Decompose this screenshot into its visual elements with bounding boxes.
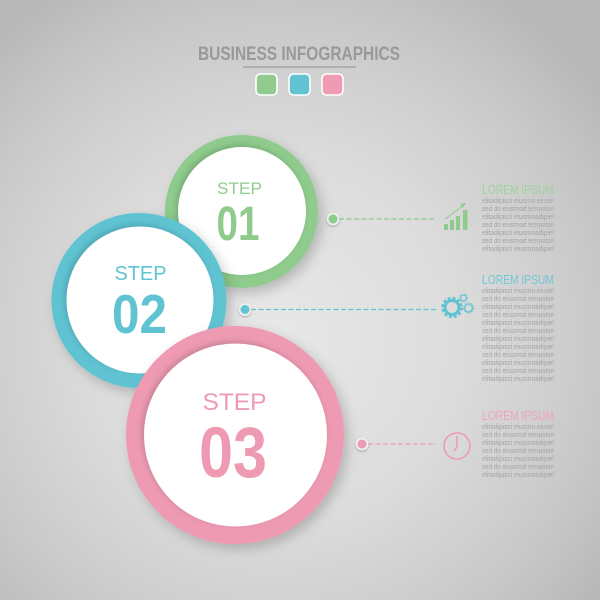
text block 02: sed do eiusmod tempotse [482,366,554,375]
step 03 circle: 03 [199,414,267,493]
text block 03: LOREM IPSUM [482,408,554,423]
connector 01 [328,214,436,224]
step 02 circle: 02 [112,283,167,345]
text block 03: elitadipisci eiusmo eiusel [482,422,554,431]
text block 02: sed do eiusmod tempotse [482,350,554,359]
text block 03: elitadipisci eiusmoadipiel [482,438,554,447]
legend swatches [256,74,343,95]
connector 03 [356,438,436,450]
icon: gears [442,294,474,317]
text block 01: sed do eiusmod tempotse [482,236,554,245]
text block 02: elitadipisci eiusmoadipiel [482,318,554,327]
connector 02 [240,304,436,315]
text block 02: sed do eiusmod tempotse [482,326,554,335]
step 03 circle: STEP [202,389,266,416]
step 02 circle: STEP [114,263,166,285]
text block 02: sed do eiusmod tempotse [482,310,554,319]
text block 02: elitadipisci eiusmoadipiel [482,358,554,367]
text block 01 [482,182,554,253]
step 02 circle [52,213,226,388]
text block 03: sed do eiusmod tempotse [482,462,554,471]
text block 03: elitadipisci eiusmoadipiel [482,470,554,479]
step 03 circle [126,326,344,544]
step 01 circle [165,135,318,288]
text block 02 [482,272,554,383]
text block 02: sed do eiusmod tempotse [482,294,554,303]
text block 01: elitadipisci eiusmoadipiel [482,244,554,253]
text block 01: sed do eiusmod tempotse [482,220,554,229]
text block 03: sed do eiusmod tempotse [482,430,554,439]
title: BUSINESS INFOGRAPHICS [198,44,400,65]
text block 03: elitadipisci eiusmoadipiel [482,454,554,463]
text block 01: elitadipisci eiusmoadipiel [482,212,554,221]
text block 01: elitadipisci eiusmo eiusel [482,196,554,205]
text block 01: LOREM IPSUM [482,182,554,197]
text block 02: elitadipisci eiusmoadipiel [482,302,554,311]
text block 02: elitadipisci eiusmoadipiel [482,342,554,351]
text block 02: elitadipisci eiusmoadipiel [482,334,554,343]
text block 03: sed do eiusmod tempotse [482,446,554,455]
text block 01: elitadipisci eiusmoadipiel [482,228,554,237]
icon: bar chart [444,203,468,230]
text block 02: elitadipisci eiusmoadipiel [482,374,554,383]
text block 02: elitadipisci eiusmo eiusel [482,286,554,295]
step 01 circle: 01 [216,198,260,251]
text block 02: LOREM IPSUM [482,272,554,287]
text block 01: sed do eiusmod tempotse [482,204,554,213]
icon: clock [444,433,470,459]
step 01 circle: STEP [217,179,262,198]
text block 03 [482,408,554,479]
